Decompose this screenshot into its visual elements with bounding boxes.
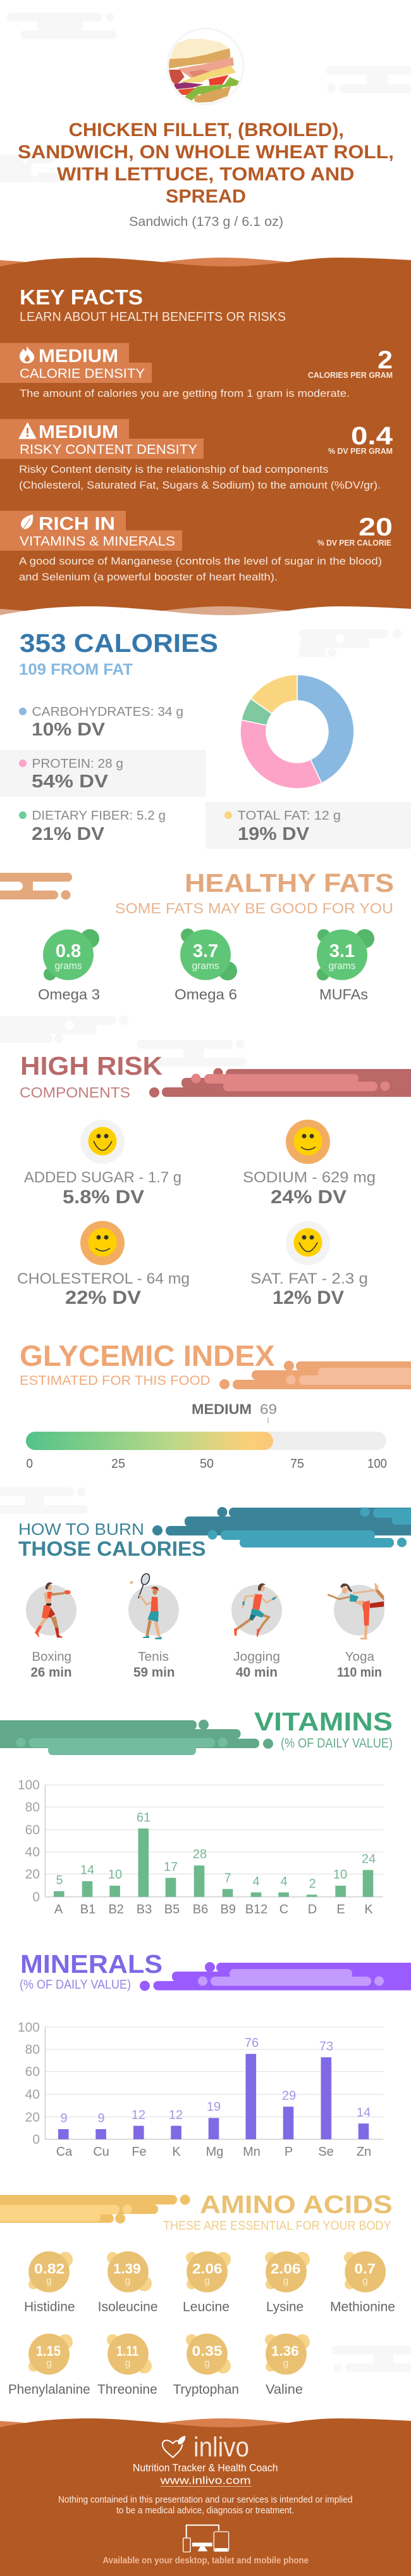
description: The amount of calories you are getting from 1 gram is moderate.	[20, 388, 350, 399]
icon: leaf	[21, 515, 33, 529]
bar chart: minerals: 100	[18, 2020, 40, 2035]
amino: histidine	[24, 2251, 75, 2314]
risk: saturated fat	[250, 1221, 368, 1308]
value: 20: 20	[359, 513, 393, 541]
disclaimer	[58, 2494, 353, 2516]
bar chart: vitamins: B6	[193, 1903, 208, 1916]
decorative cloud: amino	[0, 2195, 190, 2223]
bar chart: vitamins: 2	[309, 1877, 316, 1891]
bar chart: vitamins: 17	[164, 1860, 178, 1874]
icon: flame	[20, 346, 34, 363]
amino: threonine: 1.11	[116, 2343, 138, 2359]
panel: footer	[0, 2418, 411, 2576]
amino: phenylalanine	[8, 2334, 90, 2397]
amino: leucine: Leucine	[183, 2300, 230, 2314]
bar chart: vitamins: 10	[333, 1868, 347, 1882]
fat: omega 6	[175, 928, 237, 1003]
risk: cholesterol	[17, 1221, 190, 1308]
value: 0.4: 0.4	[351, 422, 393, 450]
amino: leucine: g	[204, 2276, 210, 2286]
bar chart: minerals: 29	[282, 2089, 296, 2103]
bar chart: minerals: 80	[25, 2042, 40, 2057]
legend: dietary fiber: DIETARY FIBER: 5.2 g	[32, 809, 166, 823]
amino: methionine: g	[362, 2276, 368, 2286]
amino: tryptophan: g	[204, 2358, 210, 2368]
panel: high risk components	[17, 1051, 411, 1308]
panel: calories	[0, 628, 411, 849]
bar chart: minerals: Fe	[132, 2145, 147, 2159]
amino: histidine: 0.82	[34, 2261, 64, 2277]
icon: happy face	[286, 1221, 330, 1265]
legend: protein: 54% DV	[32, 772, 109, 792]
activity: yoga: Yoga	[345, 1650, 375, 1664]
bar chart: minerals: 0	[32, 2132, 40, 2147]
panel: glycemic index	[20, 1339, 411, 1471]
icon: yoga pose	[328, 1584, 384, 1639]
bar chart: minerals: 19	[207, 2100, 221, 2114]
key facts heading: KEY FACTS	[20, 285, 143, 309]
legend: carbohydrates: 10% DV	[32, 720, 106, 740]
activity: tennis	[128, 1572, 179, 1680]
key facts subtitle: LEARN ABOUT HEALTH BENEFITS OR RISKS	[20, 310, 286, 324]
bar chart: minerals: 60	[25, 2065, 40, 2079]
amino: lysine	[265, 2251, 310, 2314]
icon: devices	[183, 2525, 229, 2552]
fat: mufas	[317, 929, 374, 1003]
website: www.inlivo.com	[159, 2475, 251, 2487]
description: A good source of Manganese (controls the level of sugar in the blood)	[19, 556, 382, 567]
logo: inlivo: inlivo	[193, 2432, 249, 2463]
decorative cloud: glycemic	[219, 1361, 411, 1389]
risk: sodium: SODIUM - 629 mg	[243, 1169, 376, 1186]
bar chart: vitamins: 24	[362, 1852, 376, 1866]
legend: carbohydrates: CARBOHYDRATES: 34 g	[32, 705, 183, 719]
gi scale: 75	[290, 1457, 304, 1471]
fat: mufas: MUFAs	[319, 986, 368, 1003]
risk: saturated fat: SAT. FAT - 2.3 g	[250, 1270, 368, 1287]
value unit: % DV PER CALORIE	[317, 538, 391, 547]
heading: vitamins: VITAMINS	[254, 1707, 393, 1736]
subheading: THESE ARE ESSENTIAL FOR YOUR BODY	[163, 2219, 391, 2233]
description: (Cholesterol, Saturated Fat, Sugars & Sodium) to the amount (%DV/gr).	[19, 480, 381, 491]
heading: glycemic index: GLYCEMIC INDEX	[20, 1339, 275, 1372]
amino: leucine	[183, 2251, 231, 2314]
heading: healthy fats: HEALTHY FATS	[185, 868, 394, 897]
title: CHICKEN FILLET, (BROILED),	[69, 120, 344, 141]
bar chart: vitamins: B5	[164, 1903, 180, 1916]
icon: happy face	[80, 1120, 125, 1164]
gi scale: 100	[367, 1457, 387, 1471]
amino: lysine: 2.06	[271, 2261, 301, 2277]
amino: valine: g	[283, 2358, 288, 2368]
gi scale: 0	[27, 1457, 33, 1471]
value: 2 calories per gram: 2	[377, 346, 393, 374]
amino: phenylalanine: 1.15	[36, 2343, 61, 2359]
bar chart: minerals: 9	[60, 2111, 68, 2125]
risk: saturated fat: 12% DV	[273, 1287, 344, 1308]
description	[19, 464, 381, 491]
disclaimer: Nothing contained in this presentation and our services is intended or implied	[58, 2494, 353, 2505]
decorative cloud: high risk	[149, 1068, 411, 1097]
bar chart: minerals: Ca	[56, 2145, 73, 2159]
decorative cloud: minerals	[140, 1962, 411, 1991]
amino: methionine: Methionine	[330, 2300, 395, 2314]
bar chart: vitamins: 5	[56, 1873, 63, 1887]
fat: omega 6: 3.7	[193, 941, 218, 961]
gi scale: 25	[111, 1457, 125, 1471]
bar chart: minerals: Mn	[243, 2145, 261, 2159]
bar chart: vitamins: 40	[25, 1845, 40, 1860]
bar chart: minerals: 14	[357, 2106, 371, 2120]
amino: methionine	[330, 2251, 395, 2314]
amino: methionine: 0.7	[354, 2261, 376, 2277]
gi value: 69	[260, 1401, 277, 1417]
icon: boxer	[26, 1582, 77, 1638]
activity: tennis: 59 min	[133, 1665, 175, 1680]
panel: healthy fats	[0, 868, 394, 1003]
tagline: Nutrition Tracker & Health Coach	[133, 2462, 278, 2474]
amino: tryptophan: 0.35	[192, 2343, 223, 2359]
bar chart: vitamins: 28	[193, 1848, 207, 1861]
title: SPREAD	[166, 186, 246, 207]
fat: omega 3: Omega 3	[38, 986, 100, 1003]
bar chart: vitamins: 0	[32, 1890, 40, 1904]
gi scale	[27, 1457, 387, 1471]
amino: isoleucine: Isoleucine	[98, 2300, 158, 2314]
bar chart: vitamins: B2	[108, 1903, 124, 1916]
legend: protein: PROTEIN: 28 g	[32, 757, 123, 771]
subheading: ESTIMATED FOR THIS FOOD	[20, 1373, 210, 1388]
legend: total fat	[206, 802, 411, 849]
heading: amino acids: AMINO ACIDS	[200, 2191, 393, 2219]
bar chart: vitamins: B1	[80, 1903, 95, 1916]
panel: key facts	[0, 258, 411, 620]
label: risky content density: RISKY CONTENT DENSITY	[20, 442, 197, 457]
activity: yoga: 110 min	[337, 1665, 382, 1680]
risk: sodium	[243, 1120, 376, 1208]
risk: cholesterol: CHOLESTEROL - 64 mg	[17, 1270, 190, 1287]
value unit: CALORIES PER GRAM	[308, 370, 393, 380]
fact: rich in vitamins and minerals	[0, 511, 393, 583]
panel: amino acids	[0, 2191, 395, 2397]
amino: tryptophan	[173, 2334, 239, 2397]
bar chart: minerals: P	[285, 2145, 293, 2159]
amino: phenylalanine: Phenylalanine	[8, 2382, 90, 2397]
logo: inlivo	[163, 2432, 249, 2463]
risk: added sugar: ADDED SUGAR - 1.7 g	[24, 1169, 181, 1186]
activity: jogging: 40 min	[236, 1665, 278, 1680]
bar chart: minerals	[18, 2020, 383, 2159]
fat: omega 6: grams	[192, 961, 219, 972]
bar chart: vitamins: 4	[252, 1875, 260, 1889]
subheading: 109 from fat: 109 FROM FAT	[19, 661, 133, 678]
title	[18, 120, 394, 207]
decorative cloud: burn	[152, 1507, 411, 1547]
bar chart: minerals: Cu	[93, 2145, 109, 2159]
risk: cholesterol: 22% DV	[65, 1287, 141, 1308]
activity: jogging	[231, 1584, 282, 1680]
rating: rich in: RICH IN	[39, 514, 115, 534]
bar chart: minerals: Mg	[206, 2145, 223, 2159]
bar chart: minerals: 73	[319, 2039, 333, 2053]
gi marker	[267, 1417, 269, 1423]
amino: lysine: Lysine	[266, 2300, 304, 2314]
amino: tryptophan: Tryptophan	[173, 2382, 239, 2397]
amino: phenylalanine: g	[46, 2358, 52, 2368]
amino: leucine: 2.06	[192, 2261, 223, 2277]
bar chart: minerals: K	[172, 2145, 181, 2159]
legend: dietary fiber: 21% DV	[32, 824, 105, 844]
bar chart: vitamins: 4	[280, 1875, 288, 1889]
risk: sodium: 24% DV	[271, 1187, 347, 1208]
bar chart: vitamins: 61	[137, 1811, 150, 1825]
fat: omega 3: grams	[54, 961, 82, 972]
bar chart: vitamins: C	[279, 1903, 288, 1916]
activity: jogging: Jogging	[233, 1650, 280, 1664]
decorative cloud: healthy fats	[0, 873, 72, 900]
description	[19, 556, 382, 583]
bar chart: minerals: 12	[132, 2108, 145, 2122]
activity: boxing: Boxing	[32, 1650, 71, 1664]
bar chart: vitamins: B12	[245, 1903, 267, 1916]
bar chart: vitamins: 100	[18, 1778, 40, 1792]
amino: threonine	[97, 2334, 157, 2397]
icon: tennis player	[128, 1572, 179, 1639]
amino: lysine: g	[283, 2276, 288, 2286]
title: WITH LETTUCE, TOMATO AND	[57, 164, 354, 185]
bar chart: minerals: Zn	[357, 2145, 371, 2159]
value unit: % DV PER GRAM	[328, 446, 393, 456]
decorative cloud: vitamins	[0, 1720, 273, 1755]
icon: jogger	[231, 1584, 282, 1637]
bar chart: vitamins: B9	[220, 1903, 236, 1916]
activity: boxing	[26, 1582, 77, 1680]
heading line: how to burn: HOW TO BURN	[18, 1520, 144, 1539]
wave top	[0, 258, 411, 270]
bar chart: vitamins: 20	[25, 1867, 40, 1882]
activity: yoga	[328, 1584, 384, 1680]
heading: high risk: HIGH RISK	[20, 1051, 163, 1080]
donut chart	[240, 675, 354, 789]
gi scale: 50	[200, 1457, 214, 1471]
subheading: components: COMPONENTS	[20, 1084, 130, 1101]
legend: carbohydrates	[19, 705, 183, 740]
icon: smile face	[286, 1120, 330, 1164]
bar chart: minerals: 20	[25, 2110, 40, 2125]
subheading: (% OF DAILY VALUE)	[281, 1736, 393, 1751]
heading: minerals: MINERALS	[20, 1949, 163, 1979]
fact: calorie density	[0, 343, 393, 399]
activity: boxing: 26 min	[30, 1665, 72, 1680]
legend: protein	[0, 750, 206, 797]
risk: added sugar	[24, 1120, 181, 1208]
panel: how to burn those calories	[18, 1507, 411, 1680]
serving size: Sandwich (173 g / 6.1 oz)	[129, 215, 283, 229]
description: and Selenium (a powerful booster of heart health).	[19, 572, 278, 583]
legend: total fat: TOTAL FAT: 12 g	[238, 809, 341, 823]
fat: mufas: grams	[328, 961, 356, 972]
bar chart: minerals: Se	[318, 2145, 334, 2159]
availability note: Available on your desktop, tablet and mobile phone	[102, 2555, 309, 2566]
bar chart: vitamins: A	[54, 1903, 63, 1916]
wave bottom	[0, 606, 411, 620]
bar chart: minerals: 9	[97, 2111, 105, 2125]
amino: valine: 1.36	[271, 2343, 299, 2359]
amino: threonine: g	[125, 2358, 130, 2368]
bar chart: vitamins: 7	[224, 1871, 231, 1885]
fat: omega 6: Omega 6	[175, 986, 237, 1003]
title: SANDWICH, ON WHOLE WHEAT ROLL,	[18, 142, 394, 163]
amino: isoleucine: 1.39	[113, 2261, 141, 2277]
heading: 353 calories: 353 CALORIES	[20, 628, 218, 658]
bar chart: minerals: 40	[25, 2087, 40, 2102]
bar chart: vitamins: 60	[25, 1823, 40, 1837]
icon: warning triangle	[19, 423, 36, 439]
fact: risky content density	[0, 419, 393, 491]
fat: omega 3: 0.8	[56, 941, 81, 961]
panel: vitamins	[0, 1707, 393, 1916]
rating: medium: MEDIUM	[39, 422, 118, 442]
amino: isoleucine: g	[125, 2276, 130, 2286]
bar chart: vitamins: K	[364, 1903, 373, 1916]
amino: isoleucine	[98, 2251, 158, 2314]
subheading: (% OF DAILY VALUE)	[20, 1978, 131, 1992]
label: vitamins and minerals: VITAMINS & MINERALS	[20, 534, 175, 549]
description: Risky Content density is the relationship of bad components	[19, 464, 329, 475]
subheading: SOME FATS MAY BE GOOD FOR YOU	[115, 900, 393, 916]
rating: medium: MEDIUM	[39, 346, 118, 366]
gi gauge bar	[26, 1432, 386, 1450]
bar chart: vitamins: 10	[108, 1868, 122, 1882]
bar chart: vitamins: 14	[80, 1863, 94, 1877]
gi rating: MEDIUM	[192, 1401, 252, 1417]
activity: tennis: Tenis	[138, 1650, 169, 1664]
panel: minerals	[18, 1949, 411, 2159]
bar chart: vitamins: B3	[137, 1903, 152, 1916]
fat: omega 3	[38, 929, 100, 1003]
wave top	[0, 2418, 411, 2431]
bar chart: minerals: 76	[245, 2036, 259, 2050]
bar chart: vitamins	[18, 1778, 383, 1916]
amino: valine	[265, 2334, 310, 2397]
amino: histidine: Histidine	[24, 2300, 75, 2314]
disclaimer: to be a medical advice, diagnosis or treatment.	[116, 2505, 294, 2516]
heading line: those calories: THOSE CALORIES	[18, 1537, 206, 1560]
bar chart: vitamins: 80	[25, 1800, 40, 1815]
bar chart: vitamins: E	[336, 1903, 345, 1916]
bar chart: minerals: 12	[169, 2108, 183, 2122]
amino: valine: Valine	[266, 2382, 303, 2397]
risk: added sugar: 5.8% DV	[63, 1187, 144, 1208]
icon: smile face	[80, 1221, 125, 1265]
legend: total fat: 19% DV	[238, 824, 310, 844]
label: calorie density: CALORIE DENSITY	[20, 366, 145, 381]
food image: sandwich	[168, 28, 243, 104]
fat: mufas: 3.1	[329, 941, 355, 961]
bar chart: vitamins: D	[308, 1903, 317, 1916]
amino: histidine: g	[46, 2276, 52, 2286]
amino: threonine: Threonine	[97, 2382, 157, 2397]
legend: dietary fiber	[19, 809, 166, 844]
